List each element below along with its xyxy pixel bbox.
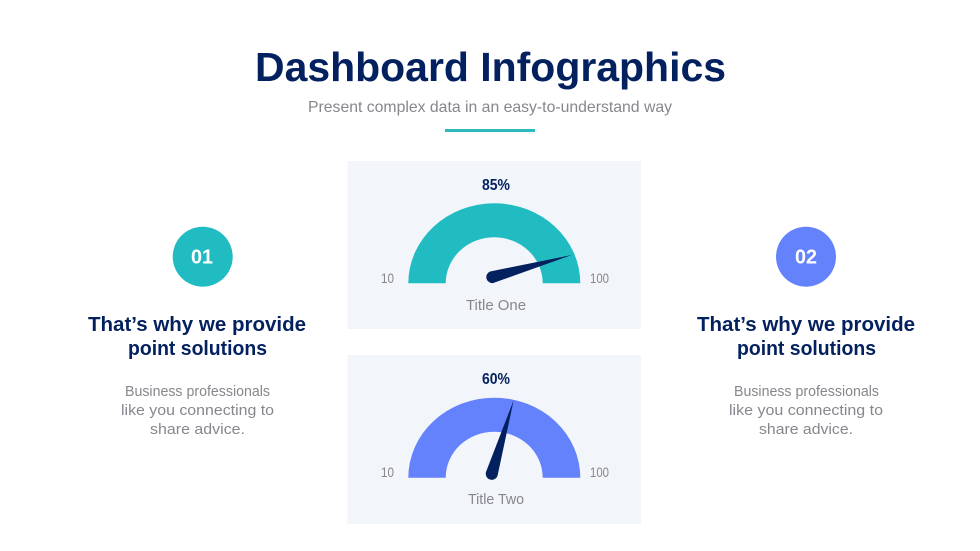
gauge one value: 85% <box>482 177 510 194</box>
gauge one needle <box>486 255 572 283</box>
gauge one background <box>348 161 641 329</box>
panel: right column 02 <box>697 227 915 438</box>
panel: left column 01 <box>88 227 306 438</box>
gauge two title: Title Two <box>468 491 524 508</box>
body text 02: share advice. <box>759 421 853 438</box>
body text 02: Business professionals <box>734 383 879 400</box>
body text 01: Business professionals <box>125 383 270 400</box>
number badge 01: 01 <box>191 246 213 268</box>
gauge two value: 60% <box>482 371 510 388</box>
number badge 01 <box>173 227 233 287</box>
gauge two minimum label: 10 <box>381 464 394 480</box>
gauge one arc <box>408 203 580 283</box>
title accent rule <box>445 129 535 132</box>
gauge one minimum label: 10 <box>381 270 394 286</box>
title: Dashboard Infographics <box>255 44 726 90</box>
heading 02: That’s why we provide <box>697 313 915 336</box>
gauge two arc <box>408 398 580 478</box>
subtitle: Present complex data in an easy-to-understand way <box>308 99 672 116</box>
gauge one maximum label: 100 <box>590 270 609 286</box>
number badge 02 <box>776 227 836 287</box>
body text 01 <box>121 383 274 438</box>
body text 02 <box>729 383 883 438</box>
gauge two background <box>348 355 641 524</box>
body text 01: like you connecting to <box>121 402 274 419</box>
panel: gauge one <box>348 161 641 329</box>
heading 02: point solutions <box>737 337 876 360</box>
number badge 02: 02 <box>795 246 817 268</box>
heading 01: point solutions <box>128 337 267 360</box>
gauge two needle <box>486 400 514 480</box>
body text 02: like you connecting to <box>729 402 883 419</box>
heading 01: That’s why we provide <box>88 313 306 336</box>
gauge two maximum label: 100 <box>590 464 609 480</box>
body text 01: share advice. <box>150 421 245 438</box>
panel: gauge two <box>348 355 641 524</box>
heading 02 <box>697 313 915 360</box>
gauge one title: Title One <box>466 297 526 314</box>
heading 01 <box>88 313 306 360</box>
